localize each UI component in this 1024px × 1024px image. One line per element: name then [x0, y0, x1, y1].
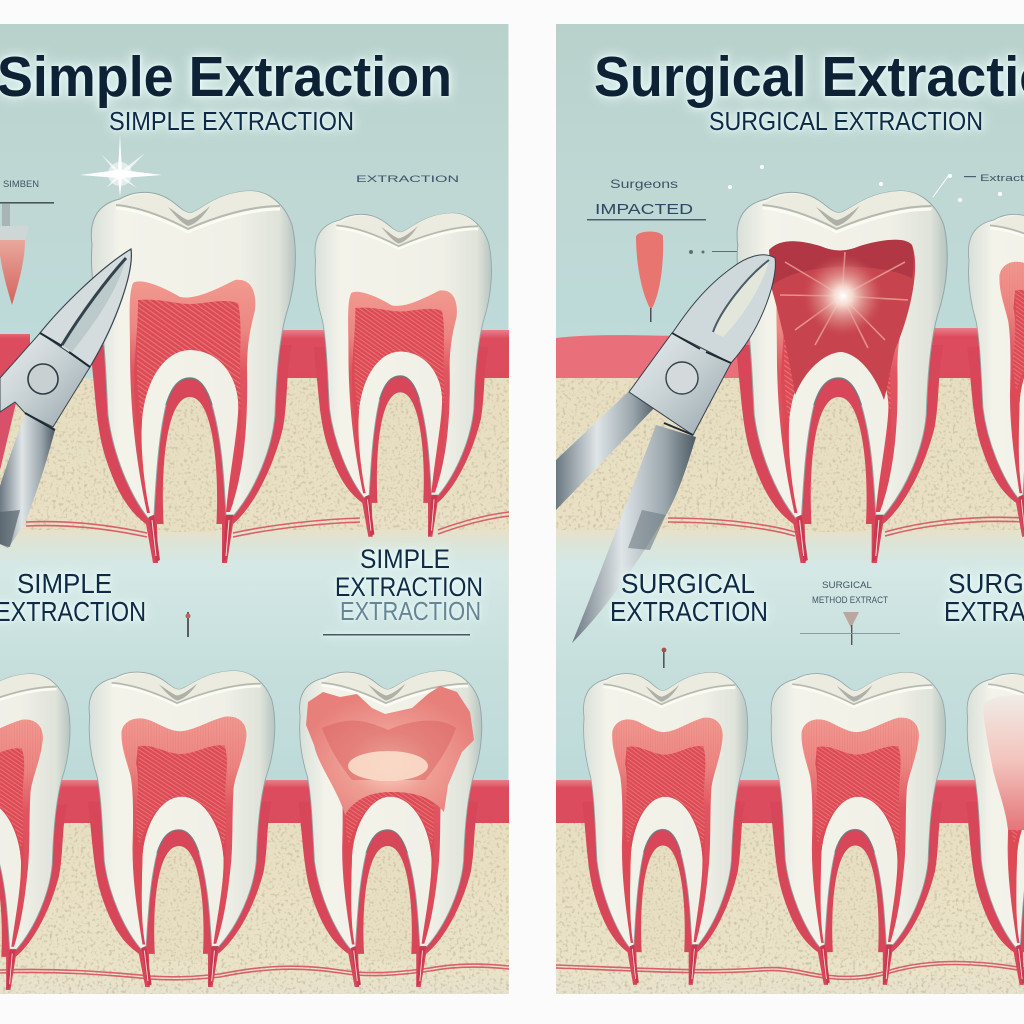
tooth: top left molar — [90, 191, 295, 563]
gum band: top row — [556, 328, 979, 378]
heading: simple extraction: Simple Extraction — [0, 45, 452, 109]
label: simple extraction right: EXTRACTION — [340, 596, 481, 626]
panel: surgical extraction — [556, 24, 1024, 994]
label: simple extraction right: EXTRACTION — [335, 572, 483, 602]
tooth: bottom left molar — [0, 674, 70, 990]
label: surgical extraction left: SURGICAL — [621, 568, 755, 599]
label: simple extraction left: SIMPLE — [17, 568, 112, 599]
tooth: bottom left molar — [582, 672, 748, 985]
bone: top row — [556, 378, 1024, 565]
gum band: bottom row — [556, 780, 978, 823]
inflamed pulp chamber — [769, 240, 915, 400]
tooth: bottom right damaged molar — [298, 671, 482, 987]
gum band: bottom row — [57, 780, 509, 823]
icon: small capsule — [636, 232, 738, 322]
small label: impacted: Surgeons — [610, 177, 678, 191]
label: surgical extraction left — [610, 568, 768, 627]
icon: small pin — [662, 648, 666, 668]
bone: top row — [0, 378, 509, 565]
small label: middle: METHOD EXTRACT — [812, 595, 888, 605]
subheading: simple extraction: SIMPLE EXTRACTION — [109, 106, 354, 136]
small label: impacted — [587, 177, 706, 220]
bone: bottom row — [556, 823, 1024, 994]
tooth: main surgical molar — [736, 191, 947, 563]
small label: middle: SURGICAL — [822, 580, 872, 590]
icon: sparkle — [80, 135, 162, 197]
icon: small pin — [186, 612, 190, 637]
subheading: surgical extraction: SURGICAL EXTRACTION — [709, 106, 983, 136]
tooth: bottom middle molar — [770, 672, 946, 985]
small label: middle — [800, 580, 900, 645]
tooth: bottom middle molar — [88, 671, 275, 987]
small label: top right: EXTRACTION — [356, 174, 459, 184]
small label: top right — [964, 174, 1024, 181]
bone: bottom row — [0, 823, 509, 994]
small label: impacted: IMPACTED — [595, 201, 693, 218]
forceps: surgical extraction — [556, 255, 775, 643]
label: surgical extraction right — [943, 572, 1024, 624]
damaged pulp chamber — [306, 686, 474, 815]
label: simple extraction left — [0, 572, 147, 624]
icon: small syringe — [0, 204, 29, 305]
label: simple extraction right: SIMPLE — [360, 544, 450, 574]
tooth: bottom right cropped molar — [966, 672, 1024, 985]
label: simple extraction right — [323, 544, 483, 636]
tooth: right cropped molar — [967, 213, 1024, 537]
small label: top left: SIMBEN — [3, 179, 39, 189]
tooth: top right molar — [314, 213, 491, 537]
label: simple extraction left: EXTRACTION — [0, 596, 146, 627]
gum band: top row — [0, 330, 509, 470]
small label: top right: Extract — [980, 173, 1024, 183]
forceps: simple extraction — [0, 249, 131, 548]
label: surgical extraction left: EXTRACTION — [610, 596, 768, 627]
small label: top left — [0, 179, 54, 204]
sparkles — [728, 165, 1002, 202]
panel: simple extraction — [0, 24, 509, 994]
